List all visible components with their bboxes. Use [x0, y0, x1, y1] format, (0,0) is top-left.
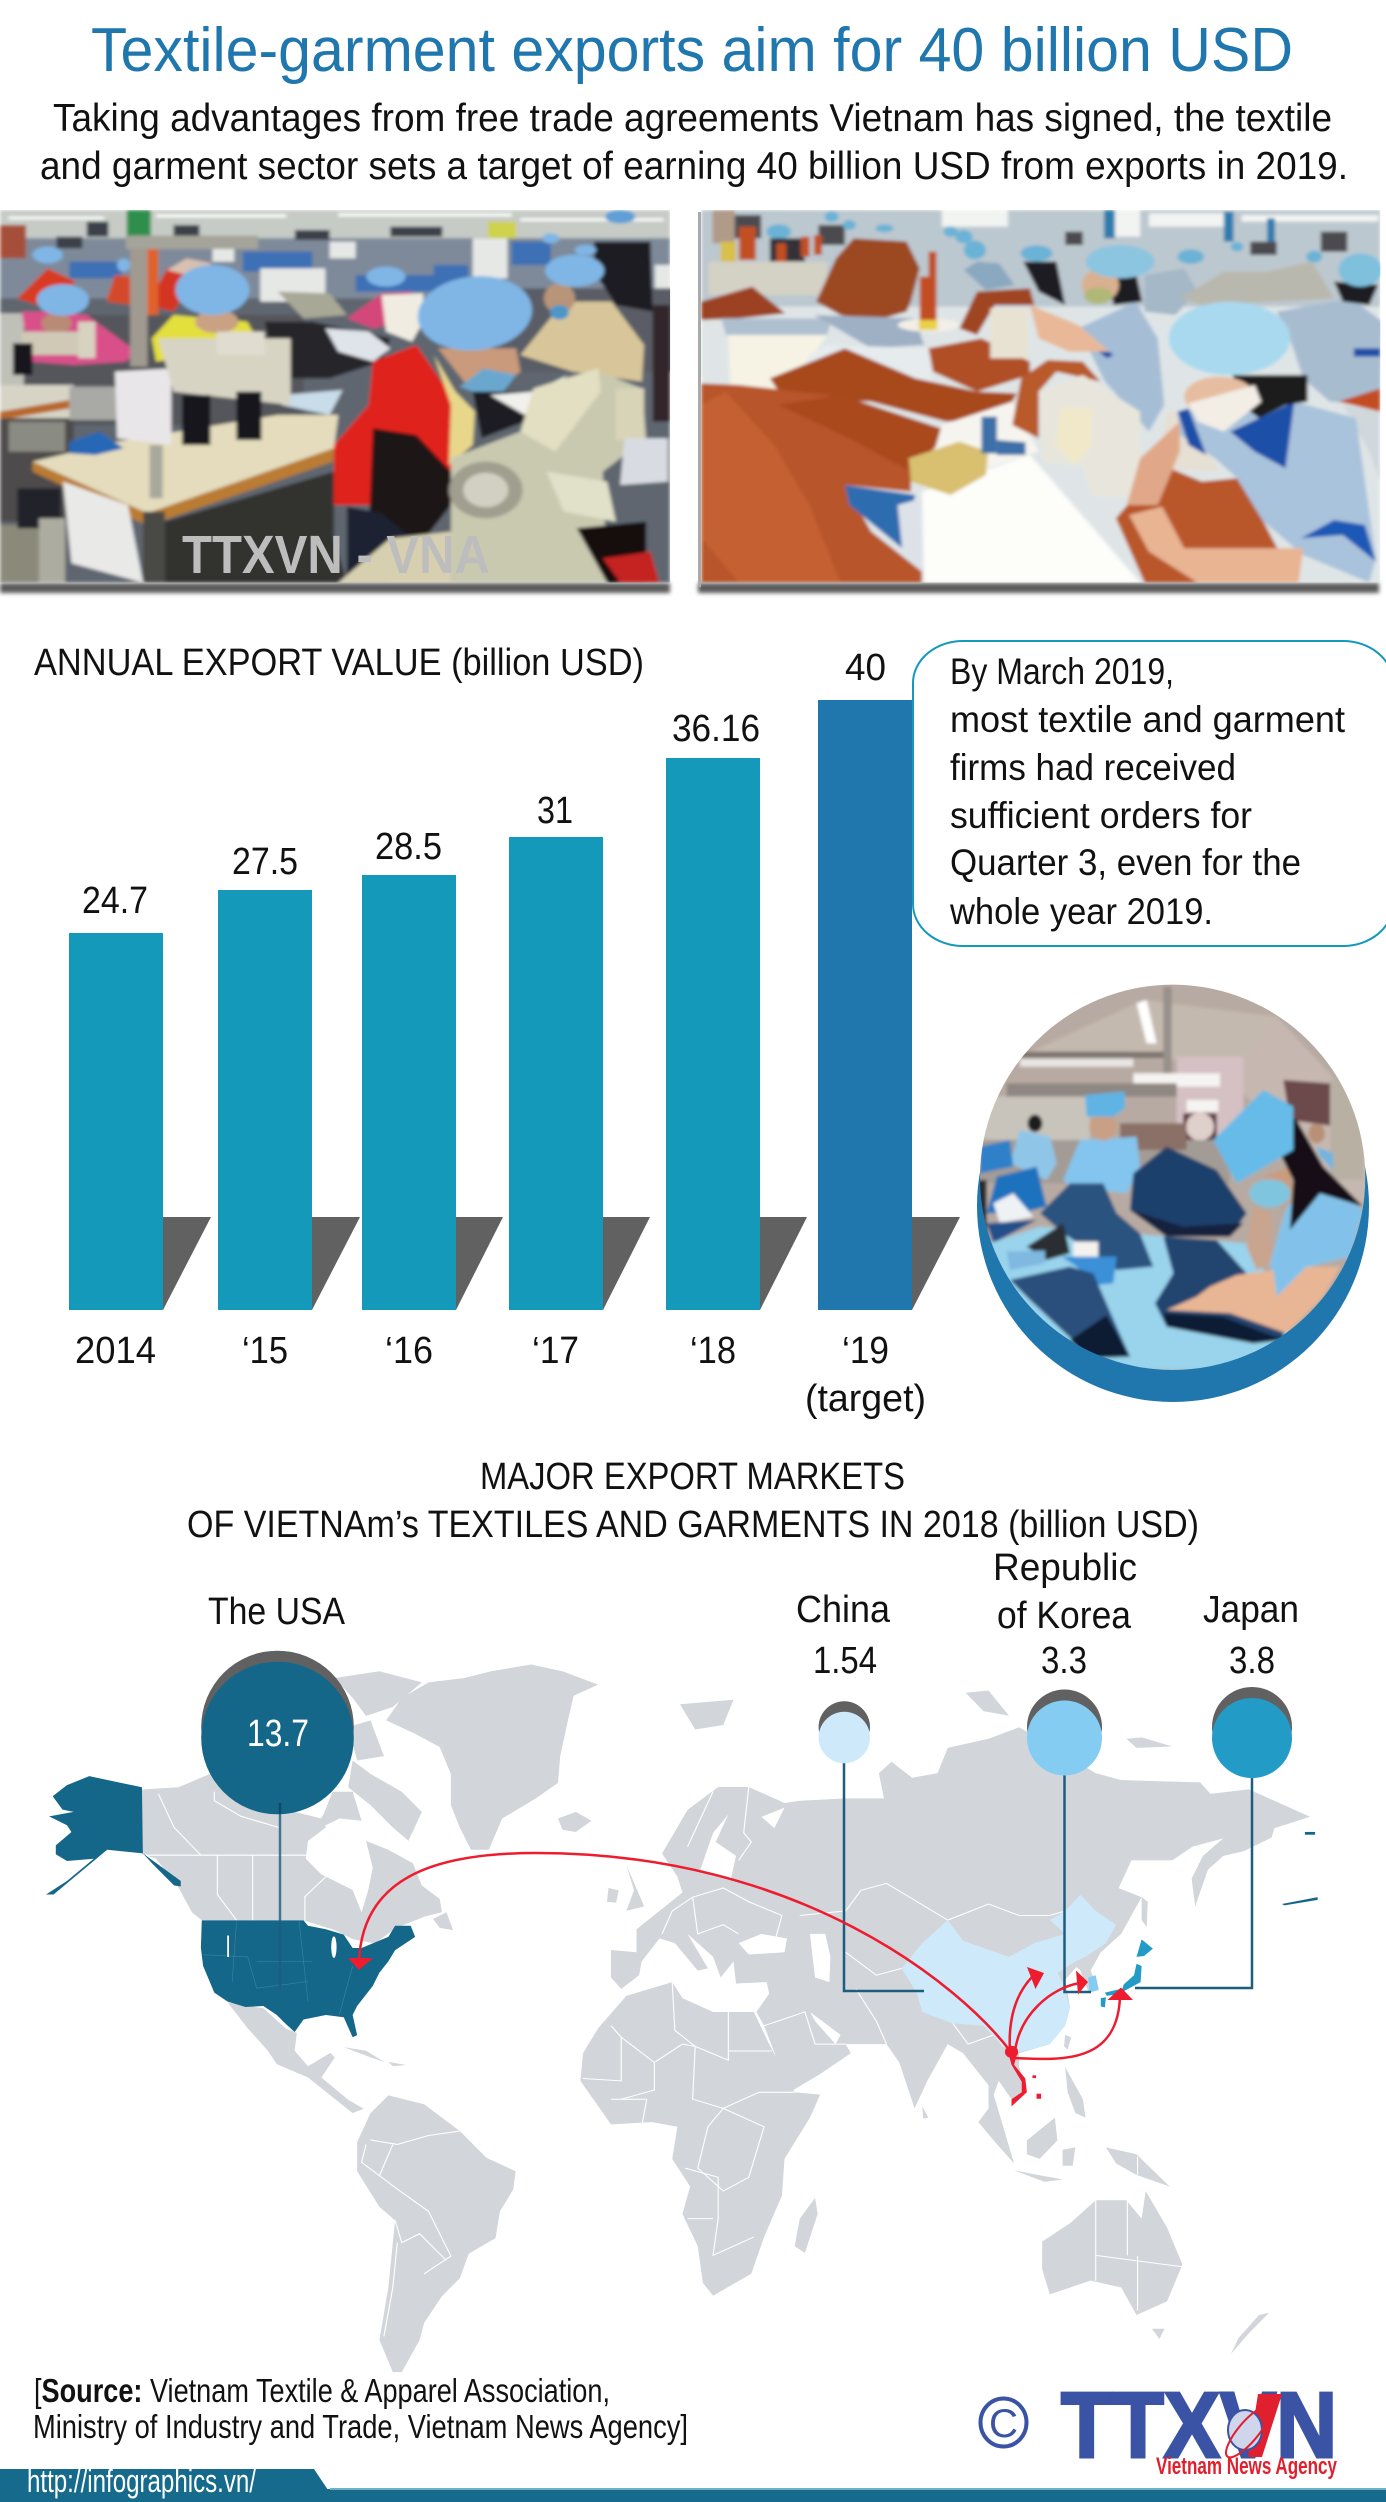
red trade arrows from Vietnam	[348, 1853, 1133, 2059]
bar 2018	[666, 708, 807, 1372]
source note: Ministry of Industry and Trade, Vietnam News Agency]	[33, 2408, 688, 2445]
world map	[46, 1665, 1318, 2372]
Vietnam	[1005, 2046, 1041, 2107]
bar chart: annual export value	[69, 647, 960, 1420]
market: Republic of Korea: 3.3	[1041, 1640, 1087, 1682]
callout: orders: firms had received	[950, 747, 1236, 788]
bar 2019 target: (target)	[805, 1378, 926, 1420]
callout: orders: Quarter 3, even for the	[950, 842, 1301, 883]
country and province borders	[142, 1792, 460, 2336]
intro text	[40, 97, 1348, 188]
section heading: major export markets	[187, 1456, 1199, 1546]
Aleutian dust	[1282, 1832, 1318, 1905]
callout: orders: sufficient orders for	[950, 795, 1252, 836]
section heading: major export markets: OF VIETNAm’s TEXTILES AND GARMENTS IN 2018 (billion USD)	[187, 1504, 1199, 1546]
market: China: China	[796, 1589, 891, 1631]
market: China	[796, 1589, 891, 1763]
callout: orders: most textile and garment	[950, 699, 1346, 740]
bar 2019 target: ‘19	[842, 1330, 889, 1372]
bar 2014: 2014	[75, 1330, 156, 1372]
bar 2019 target	[805, 647, 960, 1420]
bar 2017: 31	[537, 790, 573, 832]
market: Republic of Korea: Republic	[993, 1547, 1137, 1589]
China	[902, 1895, 1116, 2052]
bar 2016: 28.5	[375, 826, 442, 868]
bar 2014: 24.7	[82, 880, 148, 922]
bar 2018: ‘18	[690, 1330, 736, 1372]
arrow to China	[1010, 1967, 1044, 2052]
photo: workers at sewing machines, left	[0, 210, 677, 593]
source note	[33, 2372, 688, 2445]
Japan	[1101, 1939, 1153, 2007]
market: China: 1.54	[813, 1640, 877, 1682]
callout: orders	[913, 641, 1386, 946]
bar 2018: 36.16	[672, 708, 760, 750]
market: Japan: 3.8	[1229, 1640, 1275, 1682]
logo: TTXVN: TTXVN	[1061, 2373, 1337, 2477]
bar 2017	[509, 790, 650, 1372]
market: USA	[201, 1591, 354, 1814]
borders	[583, 1787, 1182, 2310]
bar 2017: ‘17	[532, 1330, 579, 1372]
footer bar with URL	[0, 2463, 1386, 2502]
circular photo: workers folding navy garments	[970, 980, 1380, 1402]
intro text: Taking advantages from free trade agreements Vietnam has signed, the textile	[53, 97, 1332, 140]
bar 2015: 27.5	[232, 841, 298, 883]
market: USA: 13.7	[247, 1713, 309, 1755]
market: USA: The USA	[208, 1591, 346, 1633]
bar 2019 target: 40	[845, 647, 886, 689]
arrow to USA	[348, 1853, 1011, 2052]
seas	[700, 1808, 1192, 2044]
section heading: annual export value: ANNUAL EXPORT VALUE (billion USD)	[34, 642, 644, 684]
connector lines	[280, 1763, 1252, 1992]
copyright mark	[980, 2398, 1026, 2446]
photo watermark: TTXVN - VNA	[182, 525, 490, 585]
market: Republic of Korea	[993, 1547, 1137, 1776]
title: Textile-garment exports aim for 40 billion USD	[91, 16, 1293, 85]
intro text: and garment sector sets a target of earning 40 billion USD from exports in 2019.	[40, 145, 1348, 188]
bar 2015	[218, 841, 360, 1372]
USA and Alaska highlighted	[46, 1776, 415, 2037]
market: Japan	[1203, 1589, 1299, 1778]
callout: orders: whole year 2019.	[949, 891, 1213, 932]
South Korea	[1088, 1975, 1099, 1993]
bar 2016: ‘16	[385, 1330, 433, 1372]
map: Americas and Greenland	[46, 1665, 598, 2372]
bar 2015: ‘15	[242, 1330, 288, 1372]
bar 2014	[69, 880, 211, 1372]
map: Africa, Eurasia and Oceania	[580, 1691, 1318, 2354]
section heading: major export markets: MAJOR EXPORT MARKETS	[480, 1456, 905, 1498]
callout: orders: By March 2019,	[950, 651, 1174, 692]
market: Republic of Korea: of Korea	[997, 1595, 1132, 1637]
footer bar with URL: http://infographics.vn/	[27, 2463, 256, 2499]
photo: workers sewing orange garments, right	[698, 210, 1382, 593]
source note: [Source: Vietnam Textile & Apparel Association,	[34, 2372, 610, 2409]
market: Japan: Japan	[1203, 1589, 1299, 1631]
arrow to Korea	[1015, 1970, 1088, 2051]
copyright mark: C	[989, 2402, 1018, 2446]
bar 2016	[362, 826, 503, 1372]
arrow to Japan	[1014, 1988, 1133, 2059]
